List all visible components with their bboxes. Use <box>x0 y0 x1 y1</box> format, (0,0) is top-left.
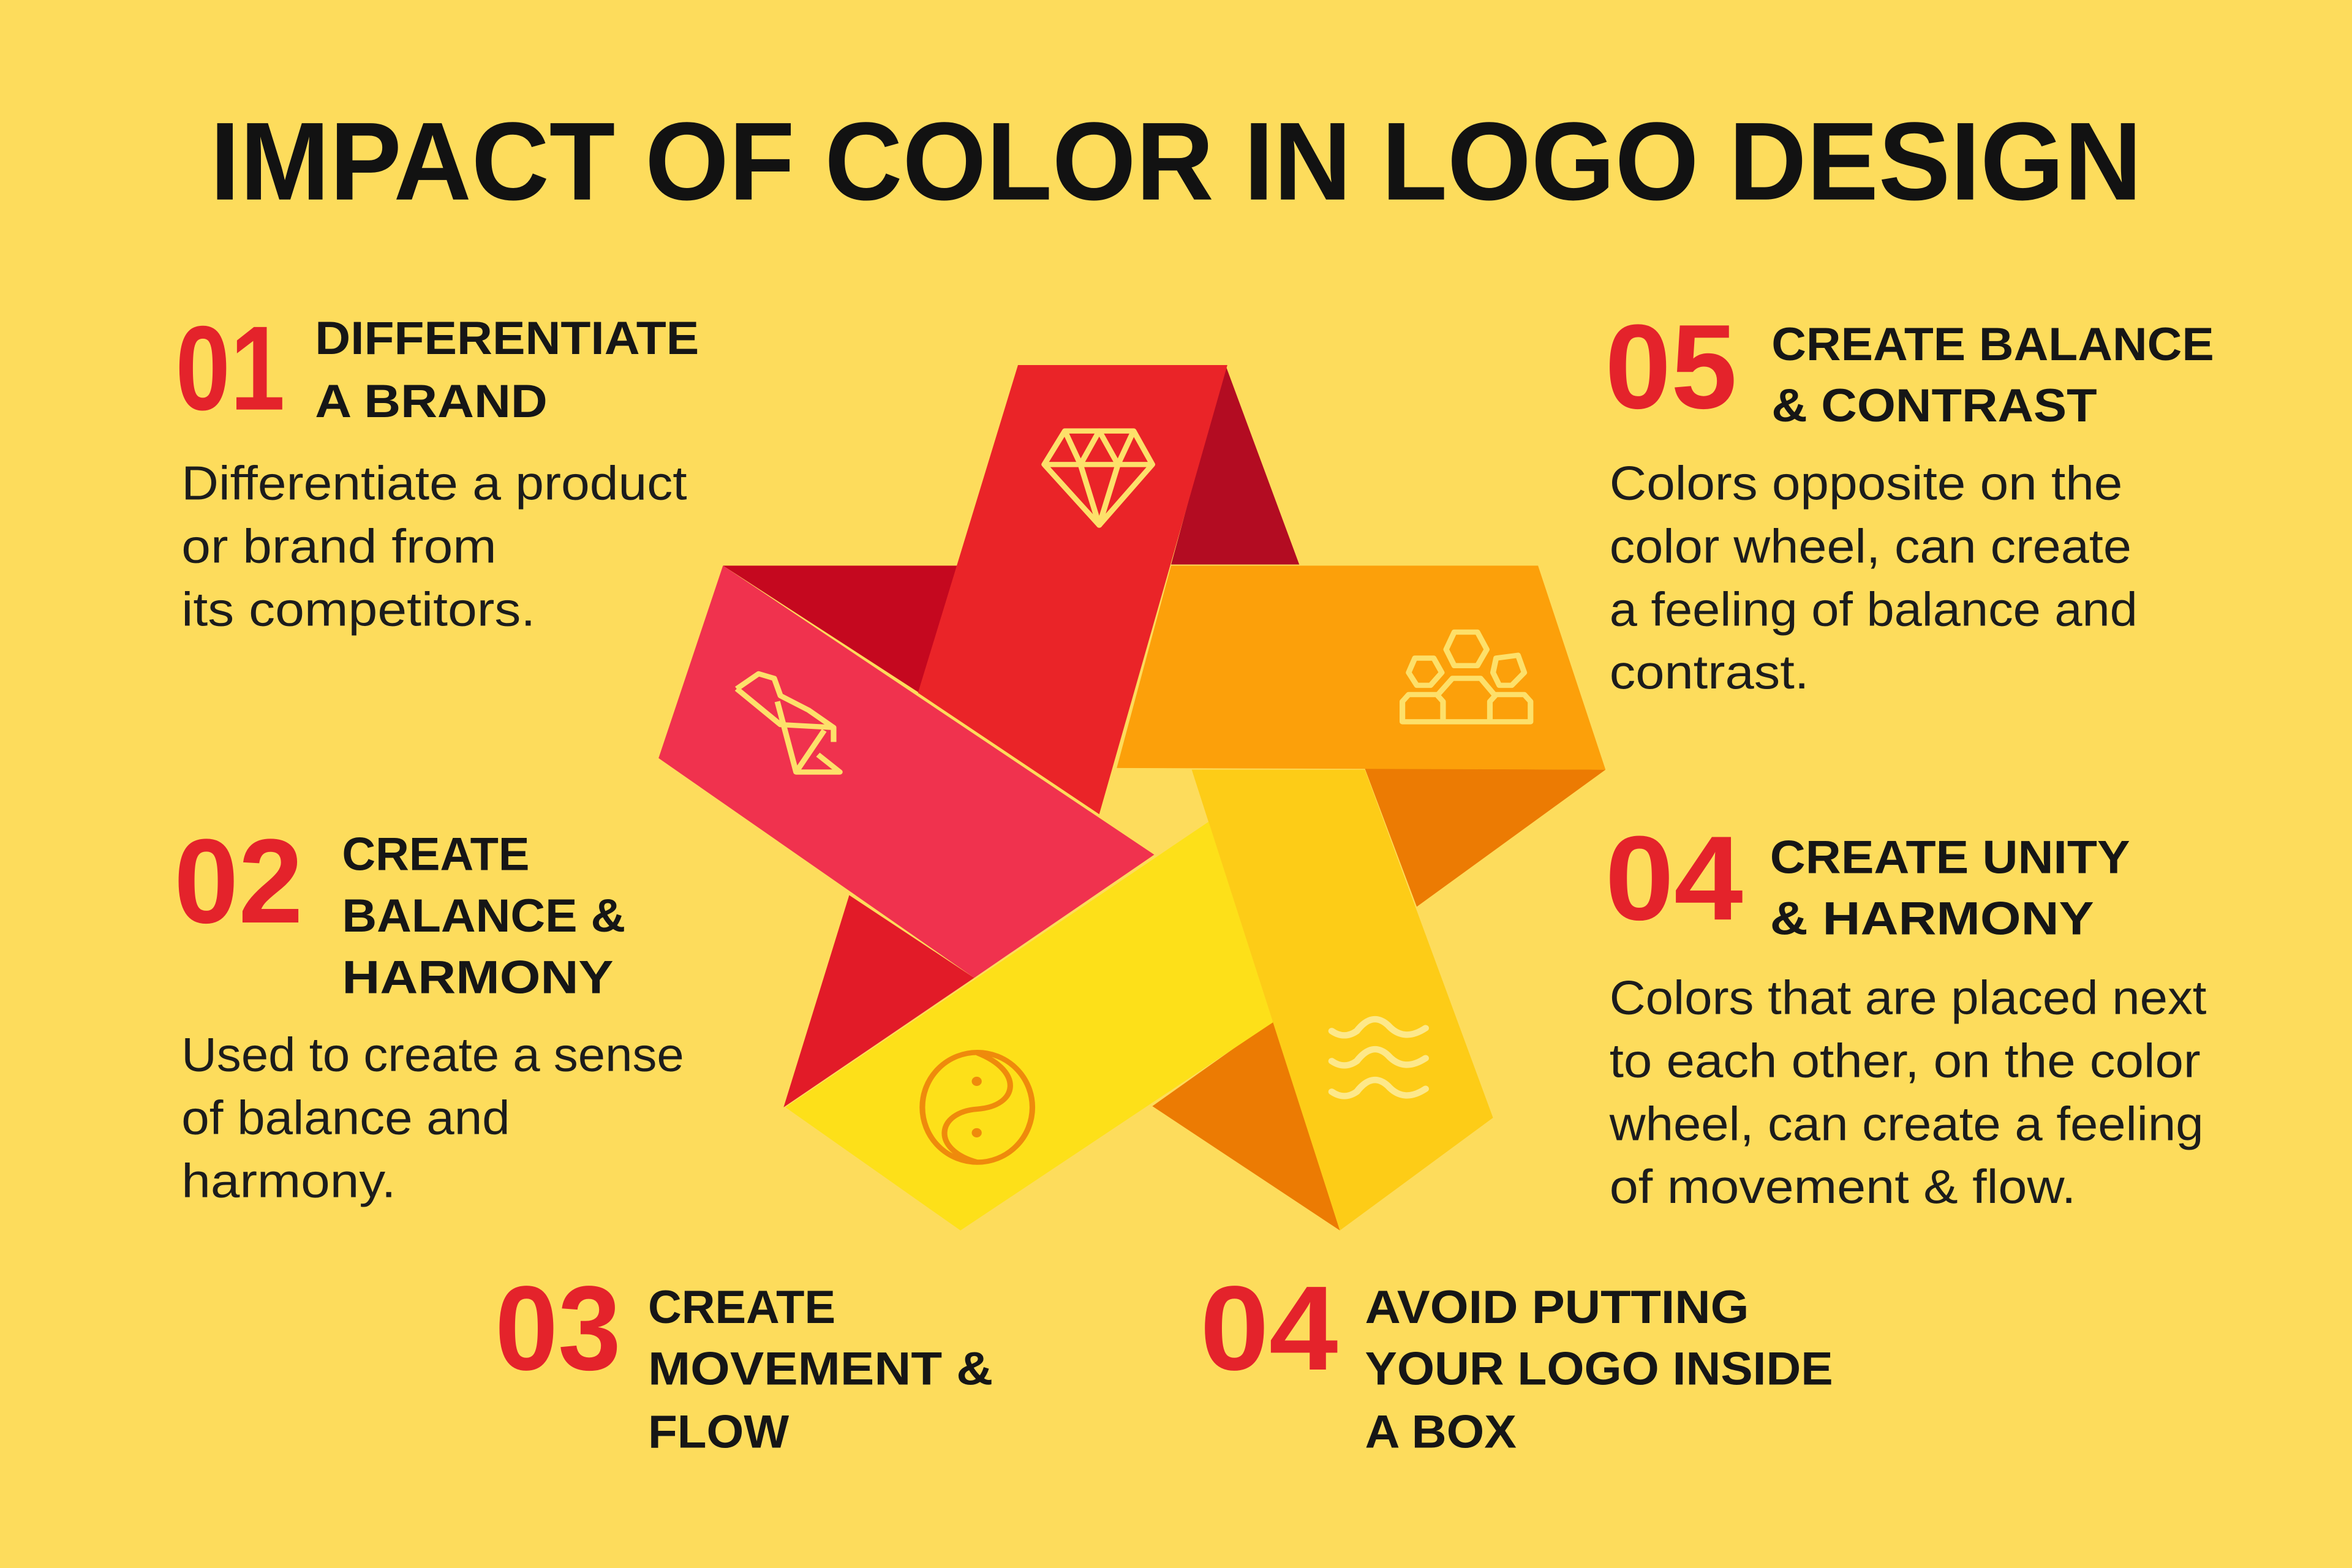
fold: right dark orange <box>1365 769 1605 907</box>
section 04 right: create unity & harmony: 04 <box>1605 811 1743 945</box>
section 04 right: create unity & harmony: to each other, on the color <box>1610 1033 2201 1087</box>
fold: bottom dark orange <box>1152 1020 1340 1231</box>
fold: top dark red <box>1171 365 1299 565</box>
section 02: create balance & harmony: BALANCE & <box>342 890 625 942</box>
section 02: create balance & harmony: CREATE <box>342 828 529 880</box>
section 03: create movement & flow: FLOW <box>648 1406 790 1458</box>
section 02: create balance & harmony: HARMONY <box>342 951 614 1003</box>
section 04 right: create unity & harmony: wheel, can create a feeling <box>1609 1096 2204 1150</box>
section 01: differentiate a brand: 01 <box>176 301 285 435</box>
section 01: differentiate a brand: DIFFERENTIATE <box>315 312 699 364</box>
section 05: create balance & contrast: Colors opposite on the <box>1610 456 2122 510</box>
icon: group of hexagons <box>1403 632 1531 722</box>
section 04 bottom: avoid putting logo inside a box: AVOID PUTTING <box>1365 1281 1749 1333</box>
section 01: differentiate a brand: Differentiate a product <box>181 456 687 510</box>
section 03: create movement & flow <box>495 1261 993 1458</box>
section 03: create movement & flow: 03 <box>495 1261 621 1395</box>
star graphic <box>658 365 1605 1231</box>
band: lower red <box>783 895 974 1107</box>
band: yellow <box>785 822 1273 1231</box>
section 02: create balance & harmony: Used to create a sense <box>181 1028 684 1082</box>
section 05: create balance & contrast: CREATE BALANCE <box>1771 318 2214 371</box>
icon: origami bird <box>737 674 840 772</box>
section 04 right: create unity & harmony: of movement & flow. <box>1610 1159 2076 1213</box>
section 01: differentiate a brand: A BRAND <box>315 375 548 428</box>
section 03: create movement & flow: MOVEMENT & <box>648 1343 993 1395</box>
section 05: create balance & contrast: color wheel, can create <box>1610 519 2132 573</box>
fold: left dark red <box>723 565 959 693</box>
section 05: create balance & contrast: contrast. <box>1610 645 1809 699</box>
icon: yin yang <box>922 1052 1032 1163</box>
section 02: create balance & harmony <box>174 814 684 1207</box>
icon: waves <box>1332 1019 1425 1096</box>
section 04 bottom: avoid putting logo inside a box: YOUR LOGO INSIDE <box>1365 1343 1833 1395</box>
section 04 right: create unity & harmony: Colors that are placed next <box>1610 971 2207 1025</box>
title: IMPACT OF COLOR IN LOGO DESIGN <box>210 100 2142 224</box>
band: orange <box>1117 565 1605 770</box>
section 03: create movement & flow: CREATE <box>648 1281 835 1333</box>
section 05: create balance & contrast: & CONTRAST <box>1771 380 2097 432</box>
section 01: differentiate a brand <box>176 301 699 636</box>
section 05: create balance & contrast: 05 <box>1605 300 1737 434</box>
section 04 right: create unity & harmony: CREATE UNITY <box>1770 831 2130 883</box>
section 02: create balance & harmony: harmony. <box>181 1153 396 1207</box>
section 04 bottom: avoid putting logo inside a box <box>1200 1261 1833 1458</box>
band: gold <box>1192 770 1493 1231</box>
section 04 right: create unity & harmony: & HARMONY <box>1770 893 2094 945</box>
section 05: create balance & contrast: a feeling of balance and <box>1610 582 2138 636</box>
section 04 bottom: avoid putting logo inside a box: 04 <box>1200 1261 1338 1395</box>
section 01: differentiate a brand: or brand from <box>181 519 497 573</box>
icon: diamond <box>1044 431 1152 525</box>
section 04 bottom: avoid putting logo inside a box: A BOX <box>1365 1406 1517 1458</box>
band: pink <box>658 565 1154 978</box>
section 02: create balance & harmony: of balance and <box>181 1090 510 1144</box>
section 04 right: create unity & harmony <box>1605 811 2207 1213</box>
band: top red <box>918 365 1227 814</box>
section 01: differentiate a brand: its competitors. <box>181 582 535 636</box>
section 02: create balance & harmony: 02 <box>174 814 303 948</box>
section 05: create balance & contrast <box>1605 300 2214 699</box>
